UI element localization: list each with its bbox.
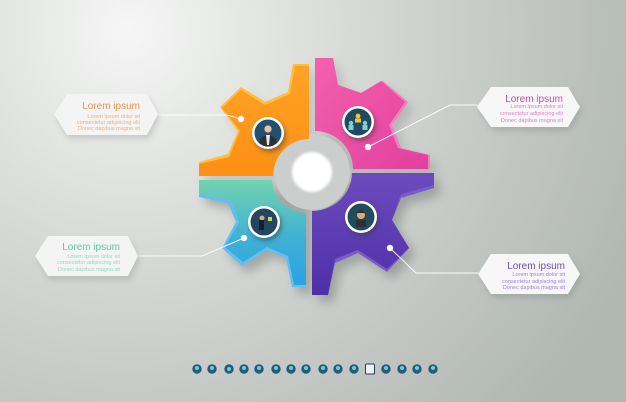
label: purple — [478, 254, 582, 298]
gear segment: teal-blue — [199, 180, 306, 287]
label: teal — [35, 236, 140, 280]
label: orange — [54, 94, 160, 139]
icon badge: team — [342, 106, 376, 141]
gear segment: purple — [312, 173, 434, 295]
icon badge: person with award — [248, 206, 282, 241]
label: orange: Lorem ipsum dolor sit — [87, 114, 140, 120]
label: purple: Donec dapibus magna sit — [503, 285, 565, 291]
leader line: orange — [158, 115, 244, 122]
icon row — [192, 364, 438, 374]
label: orange: Lorem ipsum — [82, 101, 140, 112]
label: teal: Lorem ipsum — [62, 242, 120, 253]
label: teal: Lorem ipsum dolor sit — [67, 254, 120, 260]
gear segment: pink — [315, 58, 430, 169]
label: purple: Lorem ipsum — [507, 261, 565, 272]
gear segment: orange — [199, 64, 309, 176]
icon badge: businessman — [252, 117, 286, 152]
leader line: teal — [138, 235, 247, 256]
gear shadow — [205, 65, 440, 302]
label: pink — [477, 87, 582, 131]
label: pink: consectetur adipiscing elit — [500, 111, 563, 117]
label: teal: consectetur adipiscing elit — [57, 260, 120, 266]
label: orange: Donec dapibus magna sit — [78, 126, 140, 132]
leader line: purple — [387, 245, 478, 273]
label: purple: Lorem ipsum dolor sit — [512, 272, 565, 278]
icon badge: graduate — [345, 201, 379, 236]
hub — [274, 134, 350, 210]
label: orange: consectetur adipiscing elit — [77, 120, 140, 126]
label: pink: Lorem ipsum — [505, 94, 563, 105]
label: pink: Lorem ipsum dolor sit — [510, 104, 563, 110]
label: purple: consectetur adipiscing elit — [502, 279, 565, 285]
label: pink: Donec dapibus magna sit — [501, 118, 563, 124]
gear — [199, 58, 434, 295]
leader line: pink — [365, 105, 478, 150]
label: teal: Donec dapibus magna sit — [58, 267, 120, 273]
